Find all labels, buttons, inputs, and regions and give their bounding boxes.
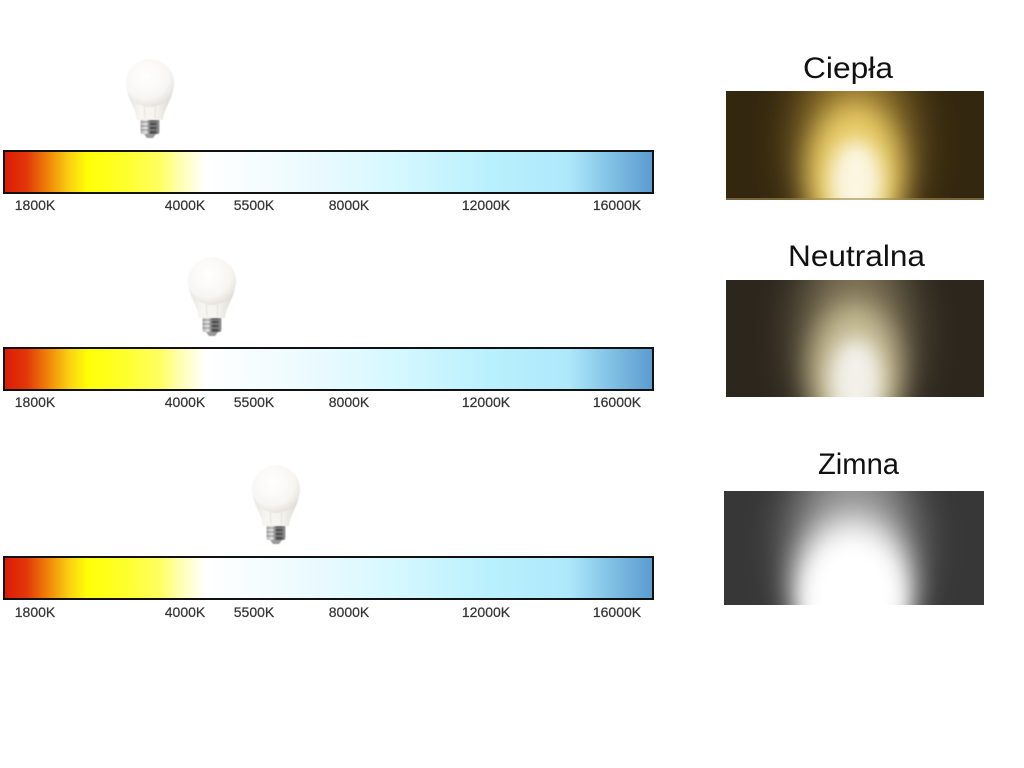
- panel: neutral colour temperature scale: [4, 257, 653, 410]
- heading: cold: Zimna: [818, 448, 899, 481]
- scale labels: 4000K: [165, 394, 206, 410]
- scale labels: 8000K: [329, 604, 370, 620]
- scale labels: 5500K: [234, 197, 275, 213]
- scale labels: 12000K: [462, 604, 511, 620]
- photo: warm light: [726, 91, 984, 200]
- scale labels: 8000K: [329, 197, 370, 213]
- icon: bulb at warm position: [126, 59, 174, 138]
- scale labels: 16000K: [593, 604, 642, 620]
- spectrum bar: [4, 348, 653, 390]
- scale labels: [15, 197, 642, 213]
- icon: bulb at neutral position: [188, 257, 236, 336]
- scale labels: 4000K: [165, 604, 206, 620]
- scale labels: 1800K: [15, 604, 56, 620]
- photo: neutral light: [726, 280, 984, 397]
- heading: warm: Ciepła: [803, 52, 893, 85]
- spectrum bar: [4, 151, 653, 193]
- scale labels: 8000K: [329, 394, 370, 410]
- scale labels: 12000K: [462, 197, 511, 213]
- panel: cold colour temperature scale: [4, 465, 653, 620]
- spectrum bar: [4, 557, 653, 599]
- scale labels: 12000K: [462, 394, 511, 410]
- scale labels: [15, 394, 642, 410]
- panel: warm colour temperature scale: [4, 59, 653, 213]
- scale labels: [15, 604, 642, 620]
- photo: cold light: [724, 491, 984, 605]
- scale labels: 1800K: [15, 197, 56, 213]
- scale labels: 5500K: [234, 604, 275, 620]
- scale labels: 5500K: [234, 394, 275, 410]
- scale labels: 16000K: [593, 197, 642, 213]
- heading: neutral: Neutralna: [788, 240, 925, 273]
- scale labels: 16000K: [593, 394, 642, 410]
- icon: bulb at cold position: [252, 465, 300, 544]
- scale labels: 1800K: [15, 394, 56, 410]
- scale labels: 4000K: [165, 197, 206, 213]
